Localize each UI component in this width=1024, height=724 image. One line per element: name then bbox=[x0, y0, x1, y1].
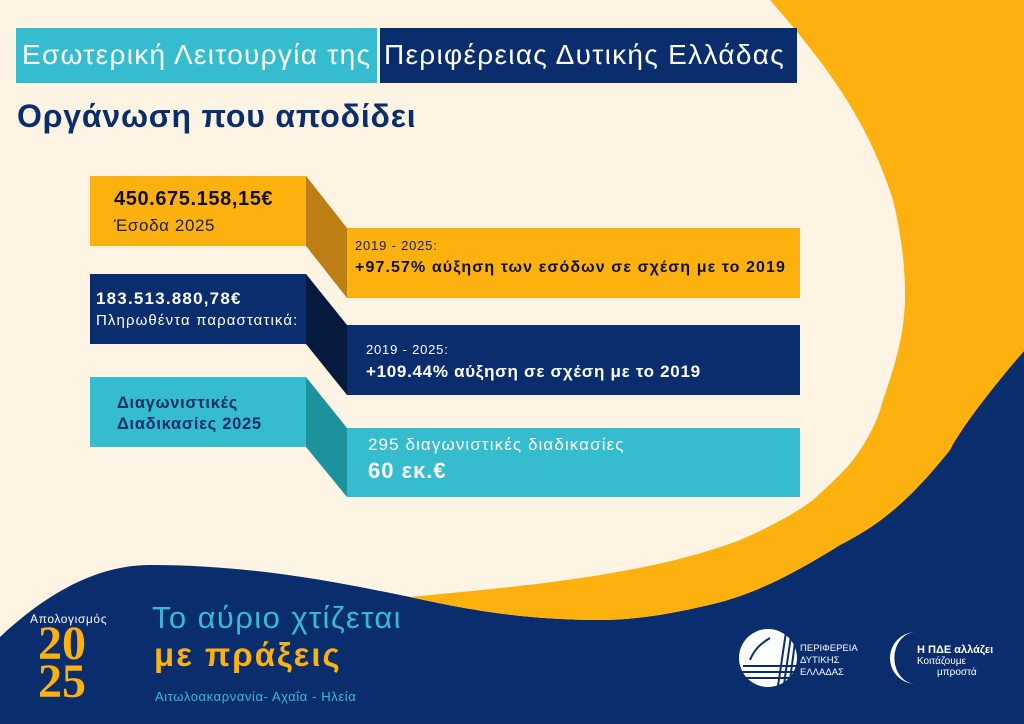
footer: slogan: Το αύριο χτίζεται bbox=[152, 600, 402, 635]
logo: slogan crescent: μπροστά bbox=[937, 667, 977, 678]
logo: region bbox=[739, 629, 858, 687]
panel: revenue: +97.57% αύξηση των εσόδων σε σχέση με το 2019 bbox=[355, 259, 786, 276]
logo: region: ΔΥΤΙΚΗΣ bbox=[800, 655, 840, 666]
panel: payments bbox=[90, 274, 800, 395]
panel: revenue bbox=[90, 176, 800, 298]
panel: payments: +109.44% αύξηση σε σχέση με το 2019 bbox=[366, 362, 701, 381]
logo: slogan crescent: Κοιτάζουμε bbox=[917, 656, 966, 667]
title bar: Περιφέρειας Δυτικής Ελλάδας bbox=[384, 39, 785, 70]
footer: slogan: Αιτωλοακαρνανία- Αχαΐα - Ηλεία bbox=[155, 689, 356, 704]
footer: report year: 20 bbox=[38, 617, 86, 670]
panel: tenders: Διαδικασίες 2025 bbox=[117, 415, 262, 433]
logo: region: ΠΕΡΙΦΕΡΕΙΑ bbox=[800, 643, 858, 654]
title bar: Εσωτερική Λειτουργία της bbox=[22, 39, 371, 70]
panel: tenders: 60 εκ.€ bbox=[368, 458, 447, 483]
title bar bbox=[16, 28, 797, 83]
footer: report year: 25 bbox=[38, 655, 86, 708]
footer: report year: Απολογισμός bbox=[30, 612, 107, 626]
panel: payments: 183.513.880,78€ bbox=[96, 289, 242, 308]
footer: slogan: με πράξεις bbox=[154, 636, 342, 673]
footer: slogan bbox=[152, 600, 402, 704]
panel: tenders: Διαγωνιστικές bbox=[117, 394, 238, 412]
panel: revenue: Έσοδα 2025 bbox=[114, 216, 215, 235]
panel: tenders bbox=[90, 377, 800, 497]
logo: slogan crescent bbox=[890, 632, 993, 684]
panel: revenue: 2019 - 2025: bbox=[355, 238, 438, 253]
panel: tenders: 295 διαγωνιστικές διαδικασίες bbox=[368, 435, 625, 454]
logo: region: ΕΛΛΑΔΑΣ bbox=[800, 667, 844, 678]
panel: revenue: 450.675.158,15€ bbox=[114, 188, 273, 210]
logo: slogan crescent: Η ΠΔΕ αλλάζει bbox=[917, 644, 993, 656]
heading: Οργάνωση που αποδίδει bbox=[17, 98, 416, 134]
footer: report year bbox=[30, 612, 107, 708]
panel: payments: 2019 - 2025: bbox=[366, 342, 449, 357]
panel: payments: Πληρωθέντα παραστατικά: bbox=[96, 312, 298, 329]
